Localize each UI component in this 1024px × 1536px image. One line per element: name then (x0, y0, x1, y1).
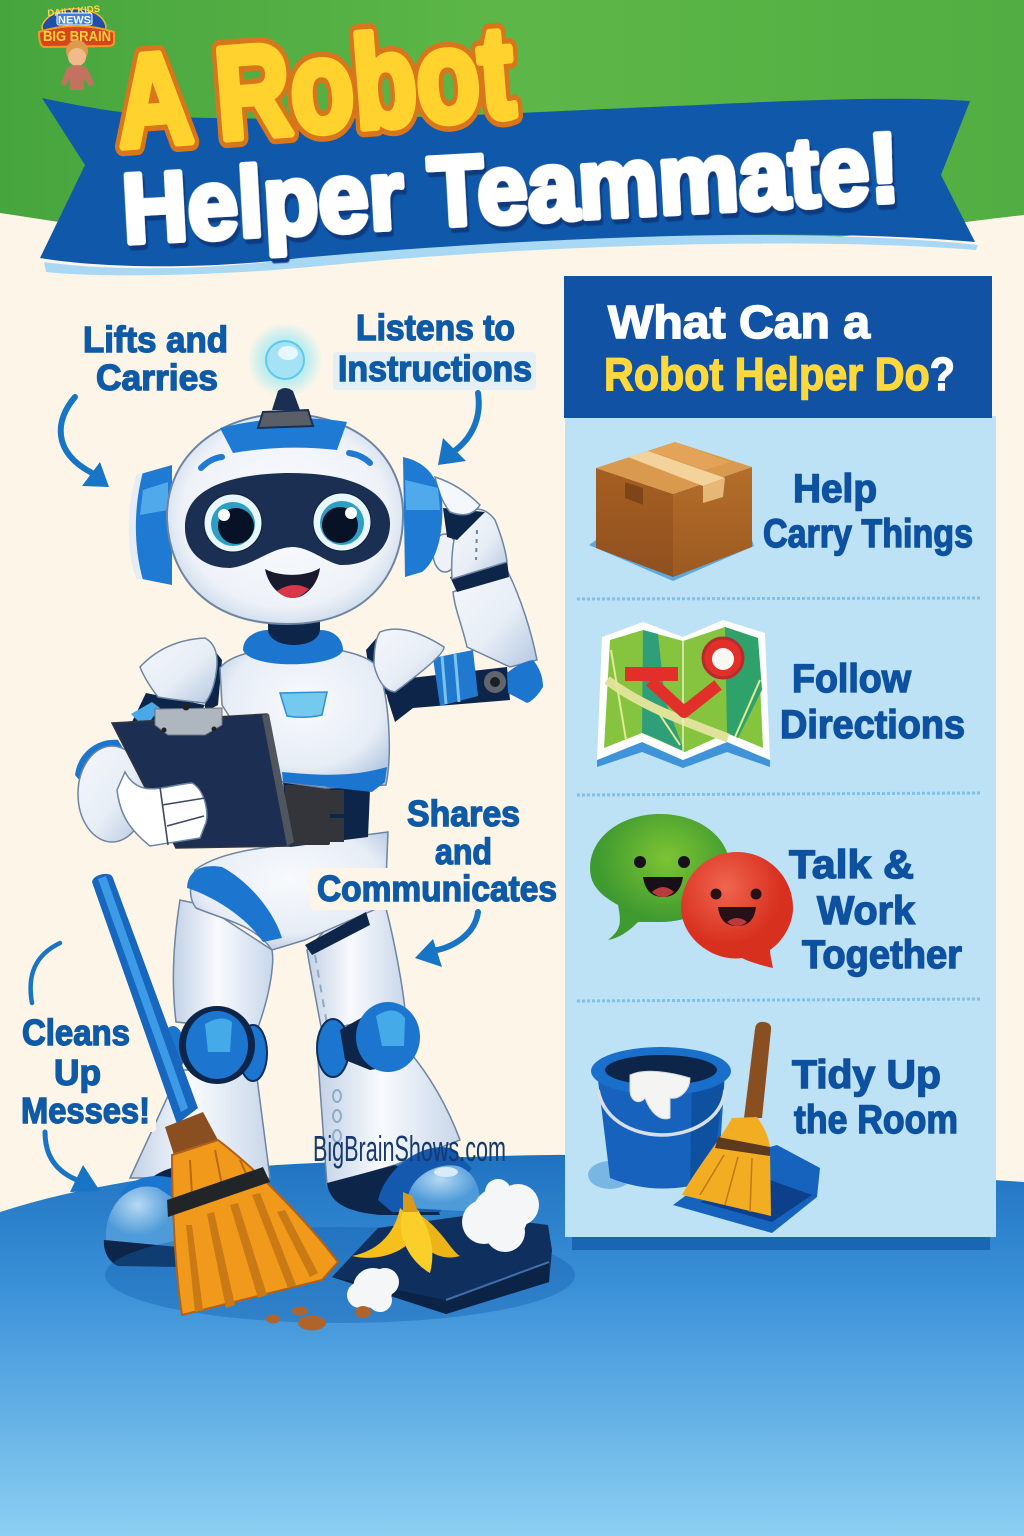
text: Tidy Up the Room: the Room (794, 1098, 958, 1142)
banner underside highlight (44, 235, 978, 275)
robot left foot (104, 1165, 196, 1267)
arrow: to Shares (415, 912, 478, 967)
label: Lifts and Carries: Carries (96, 357, 218, 398)
item: help carry things (589, 442, 973, 581)
robot forehead panel (220, 418, 347, 453)
label: Cleans Up Messes!: Messes! (21, 1090, 150, 1131)
robot head (167, 414, 403, 624)
robot chest screen (280, 692, 327, 717)
text: Talk & Work Together: Talk & (789, 843, 914, 887)
logo: Daily Kids News Big Brain: NEWS (58, 14, 91, 26)
red bubble (681, 852, 793, 968)
arrow: to Listens (438, 393, 479, 465)
text: Help Carry Things (763, 467, 973, 556)
label: Cleans Up Messes!: Up (54, 1052, 101, 1093)
icon: cardboard box (589, 442, 754, 581)
panel body (565, 416, 996, 1237)
text: Talk & Work Together: Work (817, 889, 916, 933)
label: Shares and Communicates: Communicates (317, 868, 557, 909)
dirt specks (266, 1306, 371, 1330)
label: Shares and Communicates: Shares (407, 793, 520, 834)
robot brow marks (201, 453, 370, 468)
robot eyes (204, 493, 371, 552)
robot raised hand (433, 477, 509, 592)
arrow: to floor from Messes (45, 1132, 100, 1192)
robot left arm (75, 638, 217, 842)
text: Follow Directions (780, 657, 965, 747)
broom bristles (682, 1117, 771, 1216)
label: Shares and Communicates: and (435, 831, 492, 872)
logo arch (42, 9, 106, 40)
logo: Daily Kids News Big Brain (39, 4, 114, 90)
label: Cleans Up Messes!: Cleans (22, 1012, 130, 1053)
banner ribbon (40, 98, 975, 266)
label: Cleans Up Messes! (16, 1012, 156, 1132)
text: Talk & Work Together: Together (802, 933, 962, 977)
panel: what can a robot helper do (564, 276, 996, 1250)
robot mouth (265, 568, 320, 598)
green bubble (590, 814, 730, 940)
item: follow directions (597, 620, 965, 768)
dustpan (673, 1145, 820, 1233)
dustpan with mess (332, 1179, 552, 1314)
icon: speech bubbles (590, 814, 793, 968)
broom (92, 874, 338, 1315)
broom handle (92, 874, 198, 1124)
robot holding hand (117, 772, 207, 846)
arrow: to Lifts (61, 397, 109, 487)
icon: map (597, 620, 770, 768)
robot ears (129, 457, 442, 585)
label: Lifts and Carries: Lifts and (83, 319, 228, 360)
robot raised arm (374, 570, 543, 722)
robot belt buckle (285, 785, 344, 845)
cloth (630, 1071, 690, 1119)
text: Tidy Up the Room: Tidy Up (792, 1053, 941, 1097)
robot character (75, 322, 543, 1267)
robot collar (243, 630, 343, 664)
bucket body (597, 1072, 725, 1189)
panel heading line 1: What Can a (608, 296, 870, 348)
crumpled paper small (347, 1268, 399, 1312)
robot clipboard (112, 704, 294, 848)
robot belt (283, 782, 370, 847)
robot right leg (307, 905, 460, 1185)
dustpan (332, 1215, 552, 1314)
logo mascot (61, 40, 94, 90)
banana peel (352, 1192, 460, 1273)
robot shoulder joints (205, 634, 392, 712)
bucket handle (598, 1090, 725, 1135)
title line: Helper Teammate!: Helper Teammate! (119, 112, 902, 264)
crumpled paper large (462, 1179, 539, 1252)
item: tidy up the room (588, 1022, 958, 1233)
robot right foot (327, 1147, 480, 1215)
logo plaque (39, 26, 114, 47)
robot neck (268, 622, 320, 650)
label: Listens to Instructions: Listens to (356, 307, 515, 348)
robot waist strip (282, 767, 387, 792)
text: Help Carry Things: Help (793, 467, 877, 511)
robot face visor (185, 473, 390, 568)
dotted dividers (577, 598, 982, 1001)
text: Tidy Up the Room (792, 1053, 958, 1142)
floor shadow (105, 1227, 575, 1323)
broom bristles (172, 1140, 338, 1315)
green hill header (0, 0, 1024, 240)
robot antenna (247, 322, 323, 428)
watermark: BigBrainShows.com (313, 1128, 506, 1169)
robot pelvis (187, 832, 388, 955)
robot right knee (317, 1002, 420, 1077)
blue floor (0, 1155, 1024, 1536)
logo text NEWS (57, 13, 92, 25)
panel heading line 2: Robot Helper Do? (604, 348, 955, 400)
logo text BIG BRAIN: BIG BRAIN (43, 28, 111, 45)
panel header background (564, 276, 992, 418)
label: Lifts and Carries (83, 319, 228, 398)
title banner (40, 0, 978, 275)
text: Talk & Work Together (789, 843, 962, 977)
broom band (167, 1167, 270, 1217)
item: talk and work together (590, 814, 962, 977)
logo text DAILY KIDS: DAILY KIDS (47, 4, 101, 19)
bucket rim (591, 1047, 731, 1095)
arrow: decorative curve above Cleans (31, 943, 60, 1003)
icon: bucket, broom and dustpan (588, 1022, 820, 1233)
label: Shares and Communicates (310, 793, 560, 910)
text: Help Carry Things: Carry Things (763, 512, 973, 556)
label: Listens to Instructions (333, 307, 536, 390)
robot left leg (130, 900, 273, 1178)
broom handle (744, 1022, 771, 1118)
label: Listens to Instructions: Instructions (338, 348, 532, 389)
robot torso (220, 647, 389, 788)
broom ferrule (165, 1112, 218, 1155)
text: Follow Directions: Follow (792, 657, 912, 701)
panel drop bar (572, 1236, 990, 1250)
text: Follow Directions: Directions (780, 703, 965, 747)
robot left knee (161, 1006, 267, 1084)
